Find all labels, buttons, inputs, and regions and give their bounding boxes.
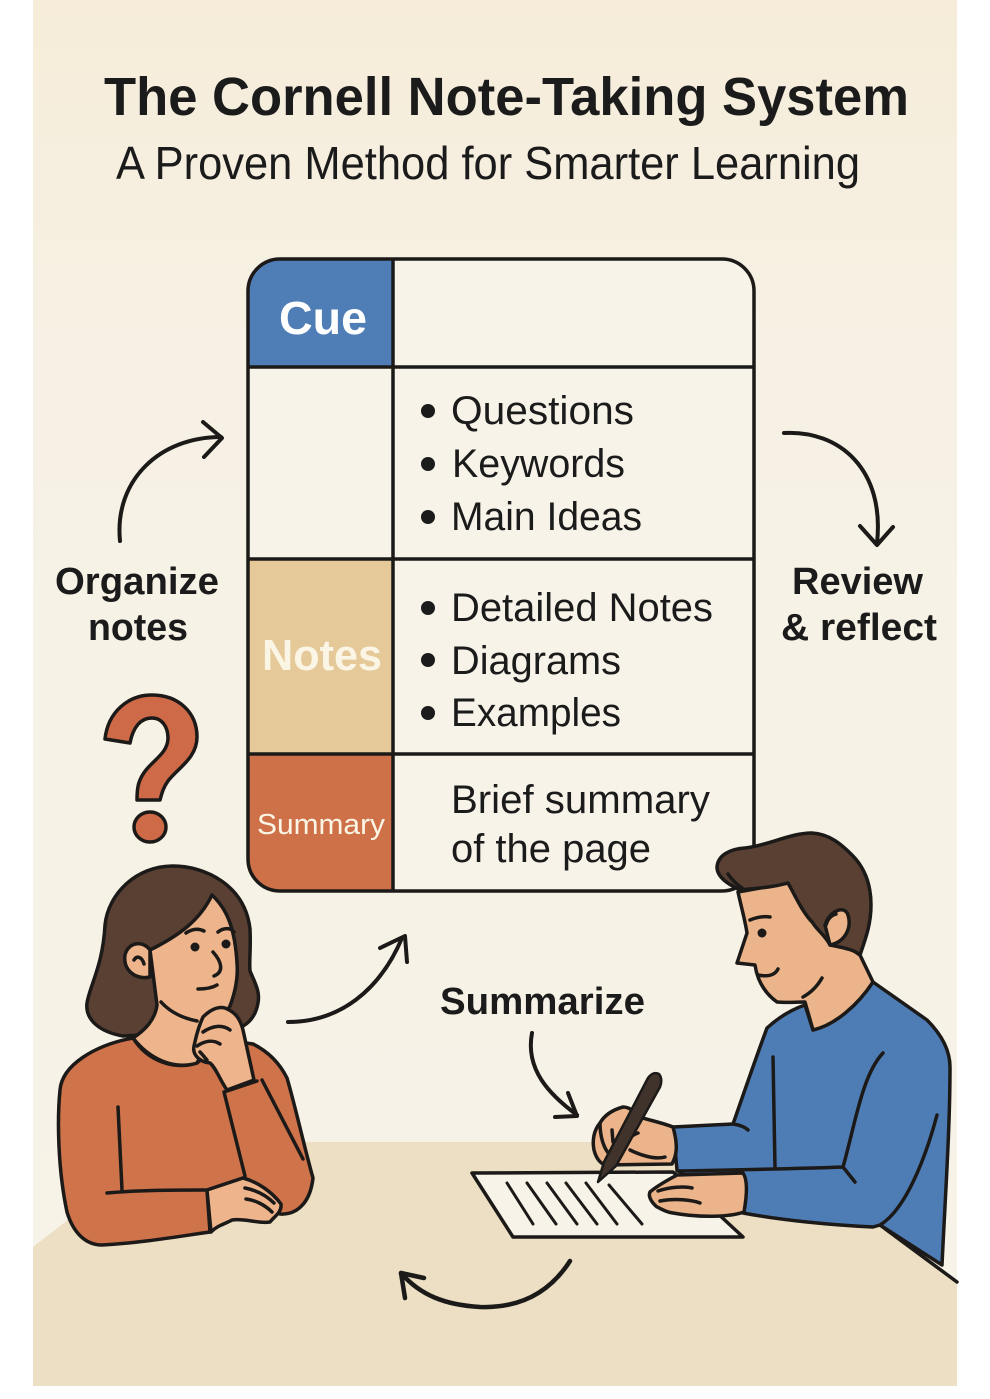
arrow: organize notes (119, 422, 222, 541)
summary cell (248, 754, 393, 891)
notes list: Examples (451, 691, 621, 735)
neck and face (737, 883, 873, 1030)
label: review and reflect (781, 561, 937, 649)
summary text: of the page (451, 827, 651, 871)
subtitle: A Proven Method for Smarter Learning (116, 137, 860, 189)
writing hand fingers (600, 1123, 665, 1158)
summary text (451, 778, 710, 871)
arrow: review and reflect (784, 433, 893, 545)
raised hand fingers (197, 1026, 230, 1060)
figure: writing man (472, 833, 957, 1282)
cue list: Questions (451, 389, 634, 433)
pen (598, 1073, 661, 1182)
figure: thinking woman (58, 866, 313, 1245)
arrow: summarize to page (531, 1033, 577, 1117)
sweater (673, 982, 950, 1265)
face details (134, 929, 234, 1021)
label: organize notes: notes (88, 607, 188, 649)
cue label: Cue (279, 292, 367, 344)
summary label: Summary (257, 809, 386, 841)
panel: Cornell notes table (248, 259, 754, 891)
label: review and reflect: Review (792, 561, 923, 603)
hair (717, 833, 871, 955)
paper lines (507, 1183, 642, 1224)
sweater (58, 1038, 313, 1245)
label: summarize: Summarize (440, 981, 645, 1023)
resting hand (649, 1173, 746, 1216)
cue cell (248, 259, 393, 367)
title: The Cornell Note-Taking System (104, 67, 909, 127)
icon: question mark (105, 695, 197, 842)
sweater lines (677, 1053, 957, 1282)
cue list: Main Ideas (451, 495, 642, 539)
ear (125, 944, 150, 978)
face details (728, 874, 836, 997)
arrow: bottom loop (401, 1261, 570, 1307)
label: organize notes (55, 561, 219, 649)
hair (87, 866, 259, 1036)
table sheet (248, 259, 754, 891)
notes list (421, 586, 713, 735)
summary text: Brief summary (451, 778, 710, 822)
label: organize notes: Organize (55, 561, 219, 603)
notes label: Notes (262, 631, 382, 680)
sleeve lines (107, 1080, 303, 1193)
ear (825, 910, 849, 945)
writing hand (593, 1107, 676, 1165)
raised hand (194, 1007, 254, 1090)
notes list: Diagrams (451, 639, 621, 683)
resting hand fingers (245, 1188, 274, 1212)
resting hand (207, 1178, 281, 1232)
arrow: woman to table (288, 936, 407, 1022)
resting hand fingers (658, 1187, 700, 1203)
cue list: Keywords (452, 442, 625, 486)
paper (472, 1172, 743, 1237)
table grid (248, 259, 754, 891)
label: review and reflect: & reflect (781, 607, 937, 649)
neck and face (133, 895, 237, 1065)
cue list (421, 389, 642, 539)
table surface (33, 1142, 957, 1386)
notes cell (248, 559, 393, 754)
notes list: Detailed Notes (451, 586, 713, 630)
